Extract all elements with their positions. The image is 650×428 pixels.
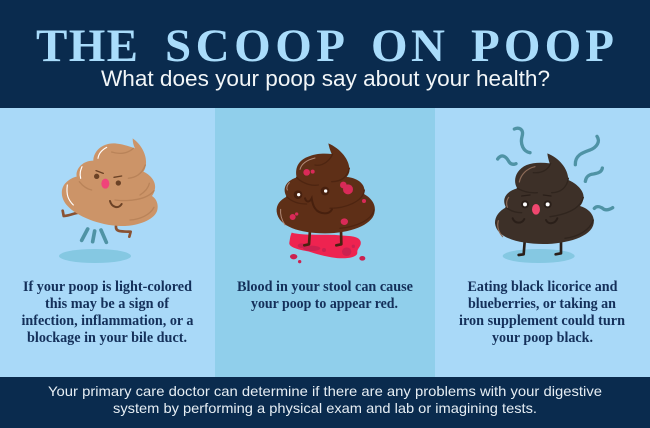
panel: header — [0, 0, 650, 108]
footer text — [48, 384, 602, 416]
footer text: Your primary care doctor can determine if there are any problems with your digestive — [48, 384, 602, 399]
title: THE — [36, 20, 138, 72]
title — [36, 20, 614, 72]
illustration: jumping light-brown poop — [59, 138, 158, 263]
text: light-colored: blockage in your bile duct. — [27, 330, 187, 346]
text: black: Eating black licorice and — [468, 279, 618, 295]
text: black: blueberries, or taking an — [468, 296, 616, 312]
subtitle: What does your poop say about your health? — [101, 66, 550, 91]
title: SCOOP — [165, 20, 345, 72]
illustration: dark smelly poop — [495, 128, 613, 263]
panel: black poop — [435, 108, 650, 377]
stink lines — [498, 128, 613, 210]
panel: footer — [0, 377, 650, 428]
title: POOP — [471, 20, 614, 72]
title: ON — [371, 20, 445, 72]
illustration: red-stained poop — [277, 143, 375, 263]
blood puddle — [289, 233, 365, 263]
text: light-colored — [22, 279, 194, 346]
text: blood: Blood in your stool can cause — [237, 279, 414, 295]
panel: blood in stool — [215, 108, 435, 377]
text: light-colored: this may be a sign of — [45, 296, 169, 312]
text: black — [459, 279, 625, 346]
text: black: iron supplement could turn — [459, 313, 625, 329]
text: light-colored: If your poop is light-colored — [23, 279, 192, 295]
text: light-colored: infection, inflammation, or a — [22, 313, 194, 329]
panel: light-colored poop — [0, 108, 215, 377]
footer text: system by performing a physical exam and lab or imagining tests. — [113, 401, 537, 416]
text: black: your poop black. — [492, 330, 593, 346]
text: blood — [237, 279, 414, 312]
text: blood: your poop to appear red. — [251, 296, 398, 312]
